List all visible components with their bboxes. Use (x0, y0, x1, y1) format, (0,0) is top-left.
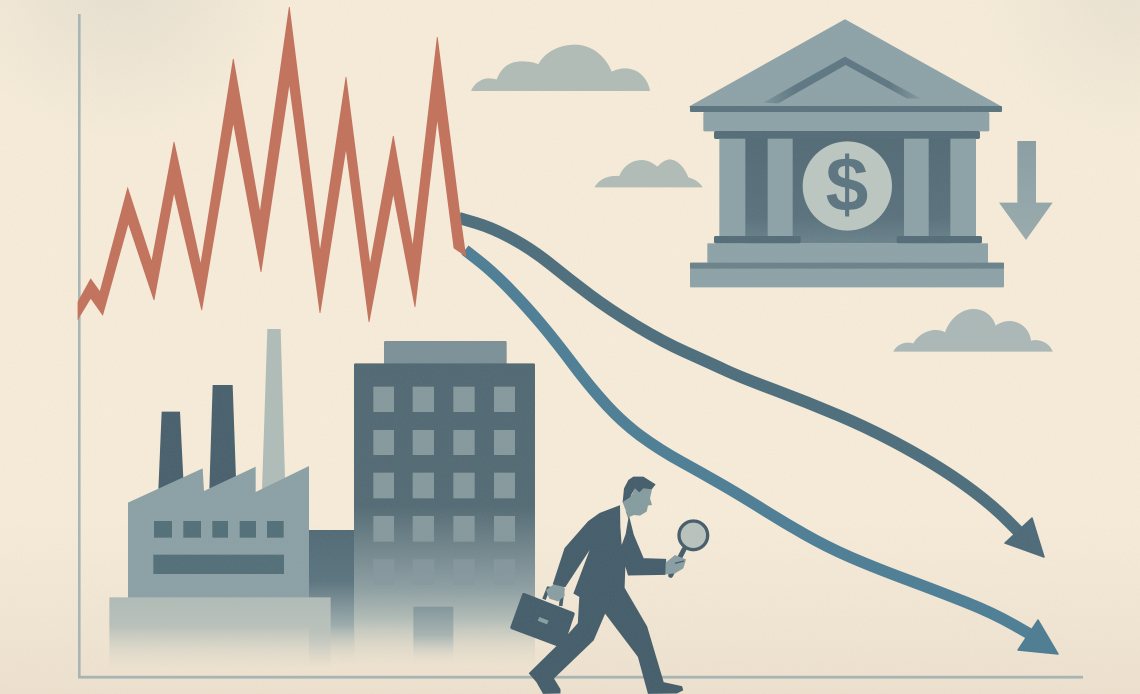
factory and office block (109, 329, 535, 670)
dollar coin (803, 141, 892, 231)
bank cornice (690, 106, 1002, 139)
bank roof pediment (690, 20, 1001, 107)
bank interior (745, 139, 951, 243)
office door (413, 607, 453, 663)
icon: down arrow beside bank (999, 141, 1053, 240)
magnifying glass (671, 521, 708, 575)
businessman with magnifying glass and briefcase (512, 477, 708, 693)
bank columns (719, 139, 976, 236)
dollar coin: $ (826, 143, 868, 228)
cloud: small center (594, 159, 703, 187)
briefcase (512, 588, 573, 646)
man's legs and shoes (529, 587, 683, 693)
bank building (690, 20, 1004, 287)
man's lower hand (546, 585, 565, 601)
office tower (354, 363, 535, 667)
connecting low block (309, 530, 354, 667)
bank steps (690, 236, 1004, 287)
arrow: upper declining trend (459, 218, 1044, 557)
man's suit jacket (553, 506, 666, 597)
factory chimneys (158, 329, 285, 490)
man's hair (623, 477, 656, 502)
factory plinth (109, 597, 331, 670)
red volatile line chart (78, 7, 466, 322)
office roof (384, 341, 507, 364)
cloud: top center (471, 45, 650, 91)
factory body (128, 466, 309, 598)
cloud: lower right (893, 309, 1053, 352)
shirt collar (620, 505, 628, 545)
man's hand holding glass (666, 555, 686, 574)
man's face (622, 488, 652, 517)
arrow: lower declining trend (465, 250, 1058, 654)
